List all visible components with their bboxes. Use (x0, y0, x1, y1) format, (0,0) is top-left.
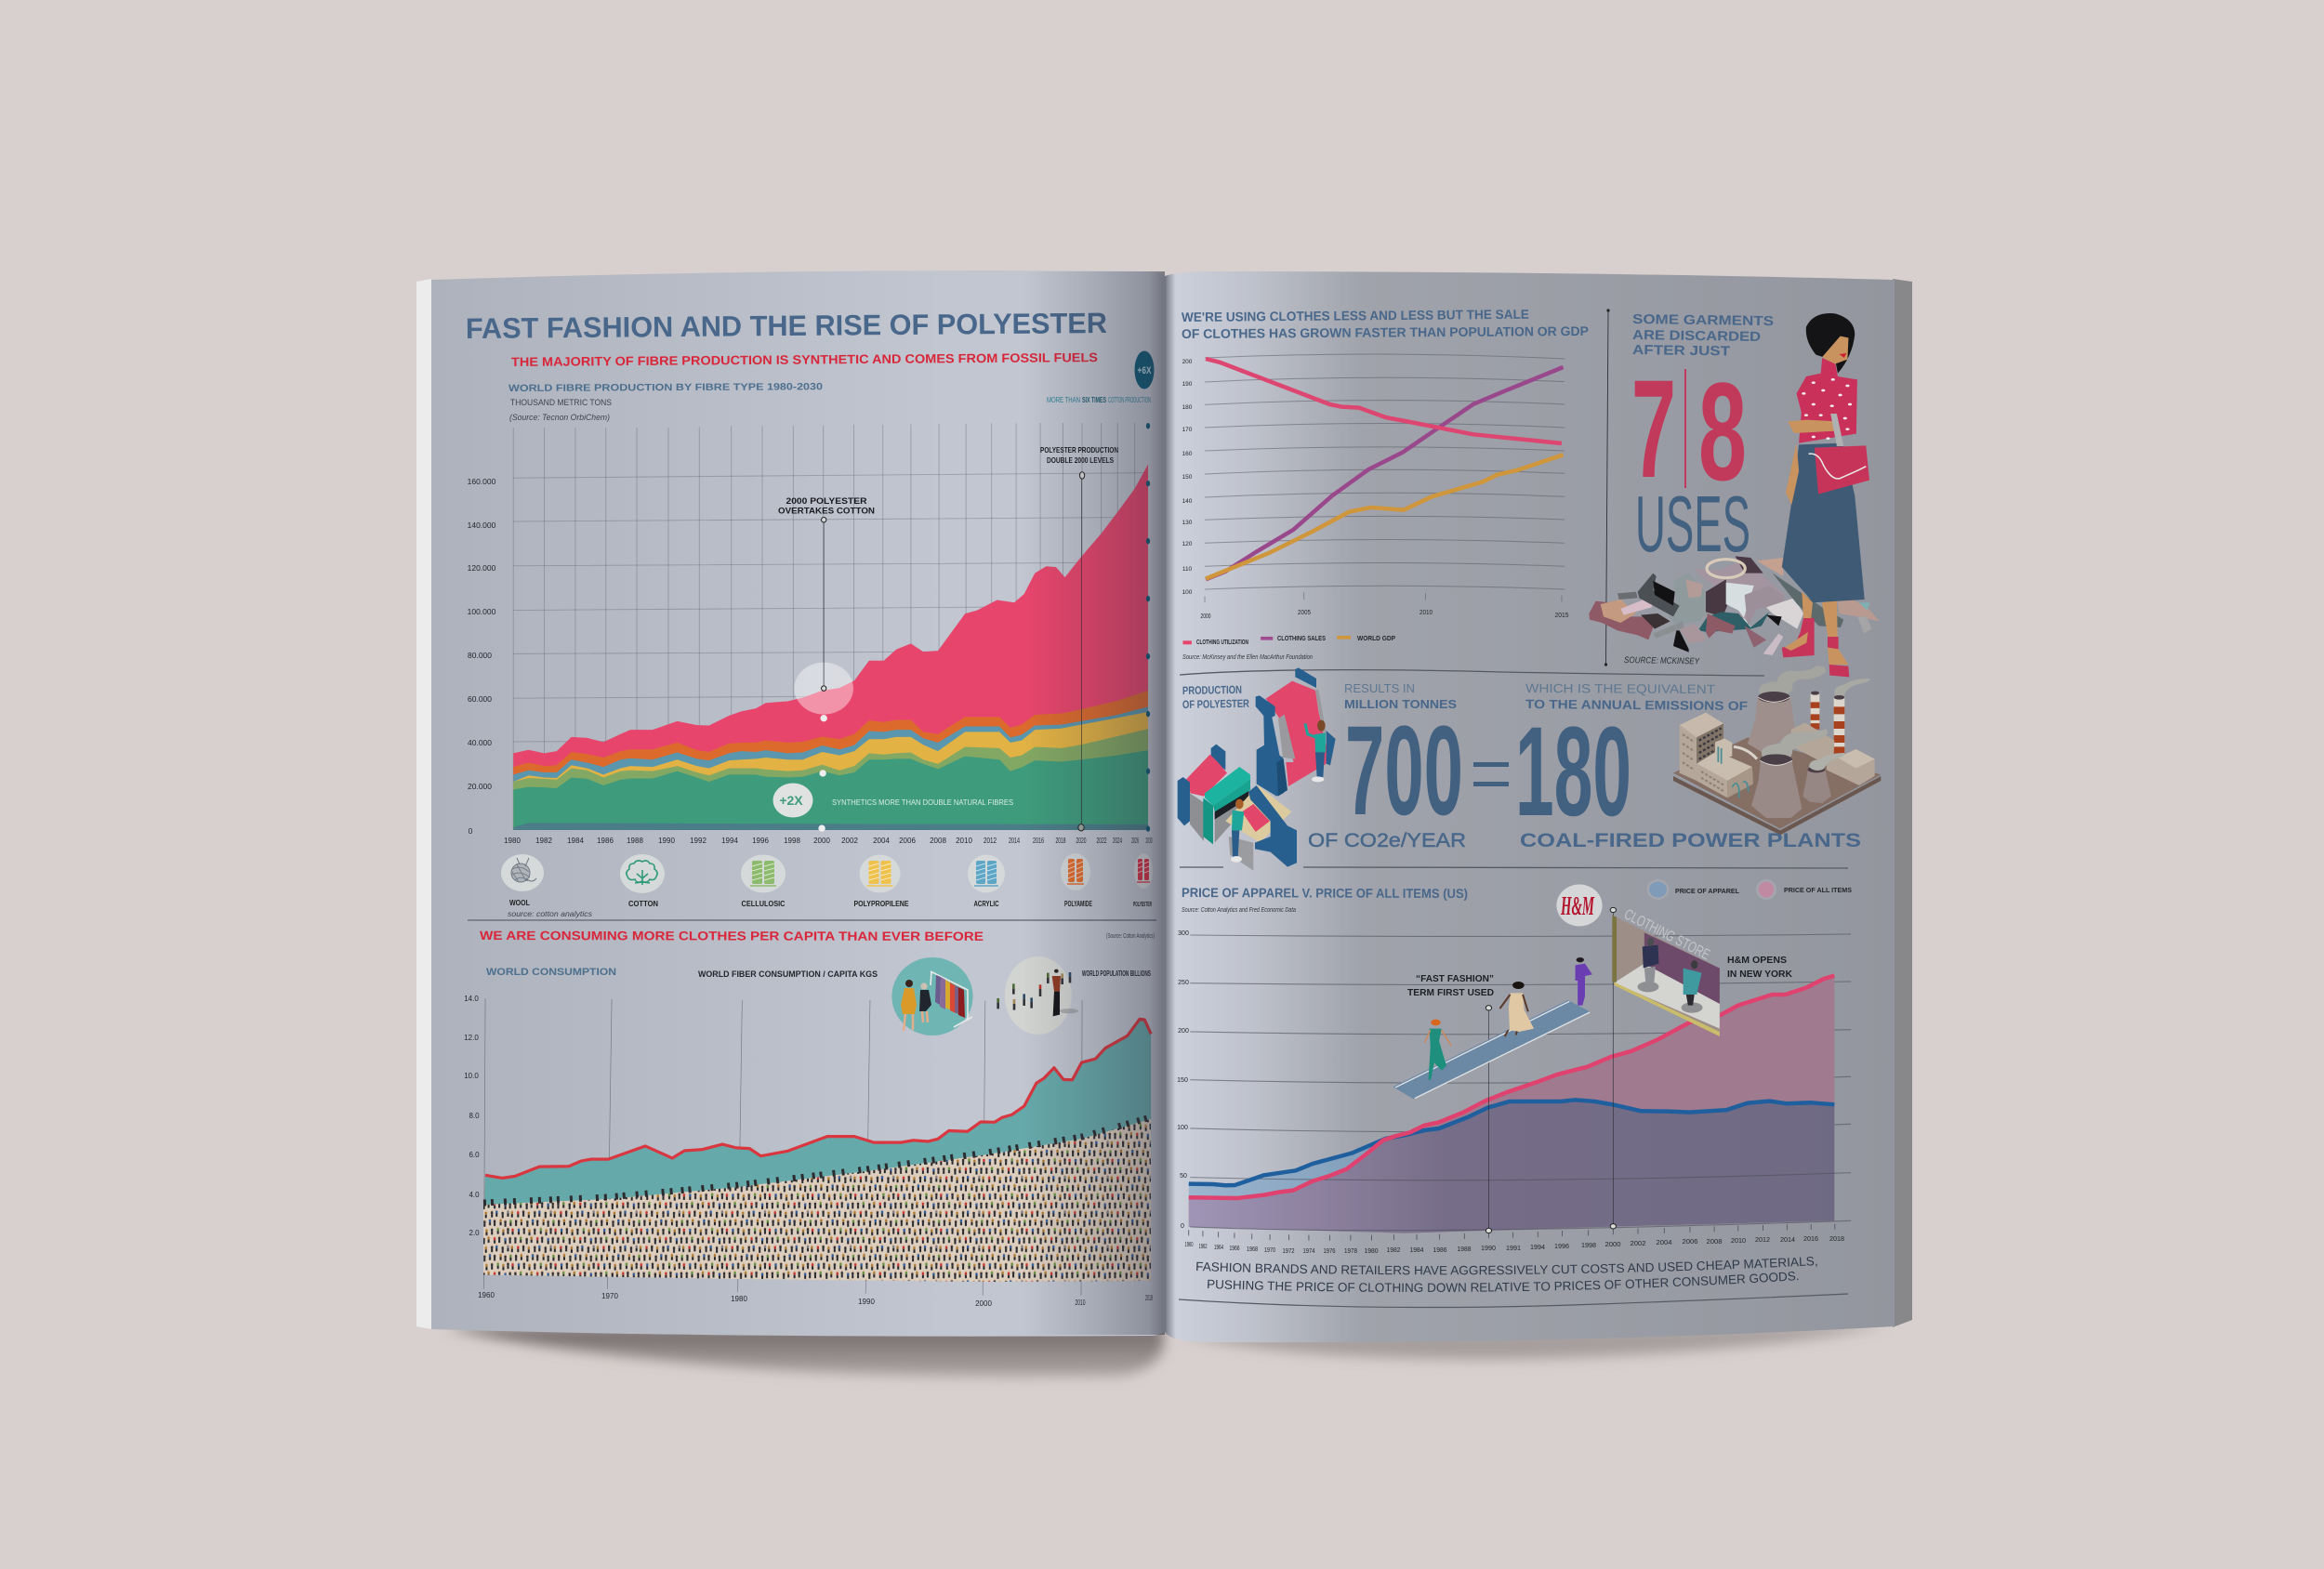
icon: polyamide (1061, 853, 1090, 890)
price chart y labels: 0 (1181, 1223, 1184, 1230)
skirt (1782, 443, 1865, 602)
x axis labels: 2008 (930, 837, 946, 845)
x axis labels: 2010 (956, 837, 972, 845)
polypropylene band (513, 712, 1148, 830)
callout: h&m opens in new york: H&M OPENS (1727, 955, 1787, 966)
big number 700: 700 (1345, 700, 1463, 842)
heading: using clothes less: OF CLOTHES HAS GROWN FASTER THAN POPULATION OR GDP (1182, 323, 1589, 341)
wool band (513, 823, 1148, 830)
hair (1806, 313, 1855, 374)
price chart source: Source: Cotton Analytics and Fred Economic Data (1182, 907, 1296, 914)
h&m leader line (1612, 910, 1614, 1226)
icon: H&M logo (1556, 885, 1603, 926)
consumption x axis labels: 1960 (478, 1291, 495, 1299)
text: some garments are discarded: AFTER JUST (1632, 343, 1730, 359)
price chart x labels: 1964 (1214, 1243, 1223, 1251)
note: more than six times: COTTON PRODUCTION (1108, 396, 1151, 404)
price chart x labels: 2012 (1755, 1235, 1770, 1244)
icon: acrylic (968, 855, 1005, 892)
price chart x labels: 1976 (1324, 1246, 1335, 1255)
world gdp line (1206, 455, 1563, 579)
label: POLYAMIDE (1064, 900, 1092, 908)
text: results in million tonnes: MILLION TONNES (1344, 697, 1457, 711)
x axis labels: 2006 (899, 837, 916, 845)
lower gridlines over area (1190, 1173, 1851, 1231)
illustration: people (998, 956, 1078, 1035)
handbag trim (1809, 454, 1866, 479)
lower machine (1178, 745, 1297, 871)
illustration: woman with handbag (1782, 313, 1869, 677)
label: POLYPROPILENE (853, 900, 909, 908)
x axis labels: 2004 (873, 837, 890, 845)
x axis labels (504, 837, 1153, 845)
gridlines (1205, 354, 1565, 602)
legend swatches (1182, 636, 1351, 644)
line chart y labels (1182, 359, 1193, 596)
price chart x labels: 1978 (1344, 1246, 1357, 1255)
consumption y axis labels: 12.0 (464, 1034, 479, 1042)
fibre legend (501, 853, 1153, 918)
price chart x labels: 2010 (1731, 1236, 1746, 1245)
apparel-only area (1189, 1139, 1386, 1198)
x axis labels: 2020 (1076, 837, 1087, 845)
x axis labels: 2024 (1113, 837, 1122, 845)
line chart legend labels: CLOTHING UTILIZATION (1196, 639, 1248, 646)
fast fashion leader line (1487, 1008, 1489, 1231)
left page: 2030 (1145, 837, 1153, 845)
of co2e per year: OF CO2e/YEAR (1308, 830, 1466, 851)
closing text (1196, 1257, 1817, 1292)
line chart y labels: 200 (1182, 359, 1193, 365)
text: results in million tonnes: RESULTS IN (1344, 682, 1415, 695)
price chart x labels: 1998 (1581, 1241, 1596, 1249)
consumption source: (Source: Cotton Analytics) (1106, 933, 1155, 940)
price legend: PRICE OF ALL ITEMS (1784, 886, 1852, 894)
model in green (1424, 1020, 1451, 1080)
price chart x labels: 1966 (1229, 1244, 1240, 1252)
illustration: clothing store (1612, 916, 1720, 1036)
price chart y labels: 100 (1177, 1125, 1188, 1131)
price chart x labels: 1986 (1433, 1246, 1446, 1254)
x axis labels: 2018 (1056, 837, 1066, 845)
callout: fast fashion term first used (1407, 973, 1494, 998)
price chart x labels: 1974 (1303, 1246, 1314, 1255)
price chart x labels: 1984 (1409, 1246, 1424, 1254)
blouse (1797, 358, 1857, 443)
price chart x labels: 1996 (1554, 1242, 1569, 1250)
price chart heading: PRICE OF APPAREL V. PRICE OF ALL ITEMS (US) (1182, 885, 1468, 901)
callout: 2000 polyester overtakes cotton: 2000 POLYESTER (786, 496, 867, 507)
heading: using clothes less: WE'RE USING CLOTHES LESS AND LESS BUT THE SALE (1182, 307, 1529, 324)
price chart x labels: 2002 (1631, 1239, 1645, 1247)
callout: polyester production double 2000 levels: POLYESTER PRODUCTION (1040, 445, 1118, 455)
label: ACRYLIC (974, 900, 999, 908)
text: production of polyester: OF POLYESTER (1182, 697, 1249, 711)
left page: POLYESTER (1133, 900, 1152, 908)
consumption x axis labels: 2010 (1075, 1299, 1086, 1307)
line chart: utilization sales GDP (1182, 354, 1565, 644)
illustration: shoppers at clothes rack (891, 957, 973, 1035)
callout: +2X (773, 783, 812, 818)
small smoke (1809, 753, 1844, 771)
overlap area (1189, 1100, 1834, 1233)
price chart y labels (1177, 930, 1189, 1230)
axis ticks (1189, 1224, 1835, 1241)
price legend: PRICE OF APPAREL (1675, 887, 1739, 895)
price chart y labels: 200 (1178, 1028, 1189, 1035)
line chart y labels: 150 (1182, 474, 1193, 481)
teal consumption area (483, 1019, 1151, 1228)
consumption x axis labels: 1980 (731, 1295, 747, 1303)
polyester overtakes leader line (823, 520, 825, 689)
right page (1165, 271, 1895, 1342)
low building (1697, 738, 1757, 798)
callout: h&m opens in new york: IN NEW YORK (1727, 969, 1792, 980)
line chart y labels: 160 (1182, 451, 1193, 457)
consumption y axis labels: 4.0 (469, 1191, 480, 1199)
price area chart (1189, 907, 1851, 1241)
back right building (1791, 722, 1834, 762)
blouse dots (1802, 378, 1852, 440)
text: results in million tonnes (1344, 682, 1457, 711)
clothing sales line (1206, 367, 1563, 579)
line chart y labels: 120 (1182, 541, 1193, 547)
gutter shading (1023, 271, 1165, 1335)
illustration: pile of discarded clothes (1589, 556, 1880, 655)
line chart y labels: 190 (1182, 381, 1193, 388)
callout: +2X: +2X (779, 793, 803, 808)
handbag (1815, 445, 1869, 494)
store sign: CLOTHING STORE (1621, 906, 1712, 963)
line chart y labels: 180 (1182, 404, 1193, 411)
illustration: polyester production machines (1178, 667, 1336, 871)
x axis labels: 2000 (813, 837, 830, 845)
callout: h&m opens in new york (1727, 955, 1792, 980)
price chart y labels: 150 (1177, 1077, 1188, 1084)
world consumption heading: WORLD CONSUMPTION (486, 967, 616, 978)
icon: polyester (1134, 853, 1153, 889)
cotton band (513, 750, 1148, 830)
vertical divider (1604, 309, 1610, 666)
marker dots (1486, 907, 1616, 1233)
y axis labels: 60.000 (468, 694, 492, 704)
line chart y labels: 100 (1182, 589, 1193, 596)
illustration: fashion runway (1393, 957, 1592, 1099)
price chart x labels: 1972 (1283, 1246, 1294, 1255)
price chart x labels: 2004 (1657, 1238, 1671, 1246)
x axis labels: 1994 (721, 837, 738, 845)
x axis labels: 2012 (984, 837, 997, 845)
price chart x labels: 2016 (1803, 1234, 1818, 1243)
closing text: PUSHING THE PRICE OF CLOTHING DOWN RELATIVE TO PRICES OF OTHER CONSUMER GOODS. (1208, 1272, 1798, 1292)
front cooling tower (1751, 759, 1802, 818)
y axis labels: 40.000 (468, 738, 492, 747)
consumption area chart (483, 998, 1151, 1296)
line chart y labels: 170 (1182, 427, 1193, 433)
y axis labels: 20.000 (468, 782, 492, 791)
y axis labels: 100.000 (468, 607, 496, 616)
y axis labels: 140.000 (468, 521, 496, 530)
population series label: WORLD POPULATION BILLIONS (1082, 969, 1151, 978)
note: more than six times (1047, 396, 1151, 404)
back smoke (1759, 666, 1826, 699)
acrylic band (513, 706, 1148, 830)
source: source: cotton analytics (508, 909, 593, 918)
highlight circle (794, 663, 853, 715)
face (1822, 336, 1848, 364)
price chart y labels: 300 (1178, 930, 1189, 937)
consumption x axis labels: 1990 (858, 1298, 875, 1306)
coal fired power plants: COAL-FIRED POWER PLANTS (1520, 830, 1861, 851)
text: equivalent annual emissions (1525, 681, 1748, 713)
consumption y axis labels: 2.0 (469, 1229, 480, 1237)
big number 7/8 (1631, 350, 1747, 509)
price chart x labels: 1988 (1458, 1245, 1471, 1253)
all items price line (1189, 976, 1834, 1198)
price chart x labels: 2008 (1707, 1237, 1722, 1246)
price chart x labels: 1980 (1365, 1246, 1378, 1255)
callout: polyester production double 2000 levels: DOUBLE 2000 LEVELS (1047, 455, 1114, 465)
callout: fast fashion term first used: “FAST FASHION” (1416, 973, 1494, 984)
consumption series label: WORLD FIBER CONSUMPTION / CAPITA KGS (698, 969, 878, 979)
line chart legend labels: WORLD GDP (1357, 636, 1395, 642)
callout: +6X: +6X (1138, 365, 1152, 376)
crowd: world population (483, 1117, 1151, 1282)
price chart x labels: 1970 (1264, 1246, 1275, 1254)
red subtitle: THE MAJORITY OF FIBRE PRODUCTION IS SYNTHETIC AND COMES FROM FOSSIL FUELS (511, 350, 1098, 369)
icon: cellulosic (741, 855, 786, 892)
x axis labels: 1996 (752, 837, 769, 845)
icon: cotton (620, 854, 665, 893)
text: production of polyester (1182, 683, 1249, 711)
x axis labels: 1990 (658, 837, 675, 845)
legs and shoes (1782, 592, 1849, 677)
price chart x labels: 2018 (1829, 1234, 1844, 1243)
label: WOOL (509, 899, 530, 907)
doubled production leader line (1081, 475, 1083, 828)
line chart x labels: 2010 (1419, 608, 1433, 616)
chart units: THOUSAND METRIC TONS (510, 398, 612, 408)
icon: polypropylene (859, 855, 900, 892)
chimney 1 (1811, 692, 1819, 728)
year lines (483, 998, 1082, 1296)
white page edge (416, 279, 431, 1329)
price chart x labels: 1994 (1530, 1243, 1545, 1251)
line chart source: Source: McKinsey and the Ellen MacArthur Foundation (1182, 654, 1313, 661)
price chart x labels: 1960 (1184, 1240, 1194, 1248)
text: some garments are discarded (1632, 312, 1775, 359)
line chart legend labels: CLOTHING SALES (1277, 636, 1326, 642)
line chart x labels (1201, 608, 1569, 620)
price legend (1647, 879, 1852, 900)
consumption x axis labels: 1970 (601, 1292, 618, 1300)
title: FAST FASHION AND THE RISE OF POLYESTER (466, 307, 1107, 345)
shadow under magazine (446, 1325, 1887, 1377)
line chart x labels: 2015 (1554, 611, 1569, 619)
marker dots (818, 472, 1085, 832)
y axis labels: 160.000 (468, 477, 496, 486)
price chart x labels: 1982 (1387, 1246, 1400, 1254)
callout: polyester production double 2000 levels (1040, 445, 1118, 465)
all items area (1189, 976, 1834, 1233)
price chart x labels: 2006 (1683, 1237, 1697, 1246)
x axis labels: 1982 (535, 837, 552, 845)
consumption y axis labels: 8.0 (469, 1112, 480, 1120)
consumption y axis labels: 14.0 (464, 995, 479, 1003)
equals sign (1473, 762, 1509, 786)
apparel price line (1189, 1100, 1834, 1185)
lips (1840, 353, 1846, 358)
consumption y axis labels: 6.0 (469, 1151, 480, 1159)
line chart y labels: 130 (1182, 520, 1193, 526)
right low building (1827, 749, 1875, 785)
text: equivalent annual emissions: WHICH IS THE EQUIVALENT (1525, 681, 1715, 696)
heading: using clothes less (1182, 307, 1589, 341)
callout: 2000 polyester overtakes cotton (778, 496, 875, 517)
big number 7/8: 7 (1631, 350, 1676, 507)
model in beige (1499, 982, 1534, 1036)
polyester band (513, 464, 1148, 830)
clothing utilization line (1206, 359, 1562, 443)
price chart x labels: 2014 (1780, 1235, 1795, 1244)
callout: 2000 polyester overtakes cotton: OVERTAKES COTTON (778, 506, 875, 517)
price chart y labels: 250 (1178, 980, 1189, 986)
text: some garments are discarded: SOME GARMENTS (1632, 312, 1775, 329)
x axis labels: 1992 (690, 837, 706, 845)
x axis labels: 2022 (1097, 837, 1107, 845)
callout: +6X (1134, 351, 1155, 389)
text: equivalent annual emissions: TO THE ANNUAL EMISSIONS OF (1525, 697, 1748, 713)
base side (1673, 776, 1881, 835)
model in purple (1576, 957, 1592, 1006)
price chart x labels (1184, 1234, 1844, 1255)
text: production of polyester: PRODUCTION (1182, 683, 1242, 697)
big number 180: 180 (1515, 701, 1631, 843)
upper body (1782, 313, 1869, 602)
upper machine (1256, 667, 1336, 797)
x axis labels: 2014 (1009, 837, 1020, 845)
consumption x axis labels: 2000 (975, 1299, 992, 1308)
closing text: FASHION BRANDS AND RETAILERS HAVE AGGRESSIVELY CUT COSTS AND USED CHEAP MATERIALS, (1196, 1257, 1817, 1275)
line chart x labels: 2000 (1201, 612, 1210, 620)
consumption y axis labels (464, 995, 480, 1237)
small cooling tower (1802, 770, 1831, 803)
word: uses: USES (1635, 481, 1750, 569)
x axis labels: 1988 (627, 837, 643, 845)
bag strap (1830, 414, 1843, 446)
illustration: coal power plant (1673, 666, 1881, 835)
gridlines (513, 423, 1147, 830)
y axis labels (468, 477, 496, 836)
label: COTTON (628, 900, 658, 908)
x axis labels: 1986 (597, 837, 614, 845)
back arm (1786, 443, 1799, 505)
x axis labels: 2002 (841, 837, 858, 845)
consumption y axis labels: 10.0 (464, 1072, 479, 1080)
cellulosic band (513, 729, 1148, 830)
line chart legend labels (1196, 636, 1395, 646)
polyamide band (513, 691, 1148, 830)
icon: wool (501, 854, 544, 891)
label: CELLULOSIC (742, 900, 786, 908)
right page block edge (1893, 279, 1912, 1327)
page sheet (1165, 271, 1895, 1342)
x axis labels: 1998 (784, 837, 800, 845)
right edge dots (1146, 423, 1150, 832)
y axis labels: 120.000 (468, 563, 496, 573)
note: more than six times: SIX TIMES (1082, 396, 1106, 404)
callout: fast fashion term first used: TERM FIRST USED (1407, 987, 1494, 998)
consumption heading: WE ARE CONSUMING MORE CLOTHES PER CAPITA THAN EVER BEFORE (480, 929, 984, 943)
x axis labels: 1980 (504, 837, 521, 845)
y axis labels: 0 (469, 826, 473, 836)
big number 7/8: 8 (1698, 353, 1747, 509)
gridlines (1190, 934, 1851, 1132)
chimney 2 (1834, 697, 1844, 755)
text: some garments are discarded: ARE DISCARDED (1632, 328, 1761, 345)
chart heading: WORLD FIBRE PRODUCTION BY FIBRE TYPE 1980-2030 (508, 381, 823, 394)
y axis labels: 80.000 (468, 651, 492, 660)
source mckinsey: SOURCE: MCKINSEY (1624, 655, 1700, 666)
page sheet (431, 270, 1165, 1337)
middle smoke (1762, 729, 1828, 762)
price chart x labels: 1990 (1481, 1244, 1496, 1252)
price chart x labels: 1962 (1199, 1242, 1207, 1250)
forearm (1788, 420, 1841, 433)
left page: 2018 (1145, 1294, 1153, 1302)
note: more than six times: MORE THAN (1047, 396, 1080, 404)
price chart x labels: 1968 (1247, 1245, 1258, 1253)
tall building (1680, 713, 1723, 781)
line chart x labels: 2005 (1298, 608, 1311, 616)
consumption x axis labels (478, 1291, 1153, 1308)
price chart x labels: 2000 (1604, 1240, 1621, 1248)
price chart x labels: 1991 (1506, 1244, 1521, 1252)
left page (431, 270, 1165, 1337)
line chart y labels: 140 (1182, 498, 1193, 505)
consumption line (485, 1019, 1151, 1178)
stacked area chart: fibre production (513, 423, 1150, 832)
x axis labels: 1984 (567, 837, 584, 845)
line chart y labels: 110 (1182, 566, 1193, 573)
price chart y labels: 50 (1180, 1173, 1187, 1180)
base (1673, 737, 1881, 829)
back cooling tower (1748, 697, 1795, 753)
x axis labels: 2016 (1033, 837, 1044, 845)
icon: H&M logo: H&M (1560, 892, 1595, 921)
note: synthetics more than double: SYNTHETICS MORE THAN DOUBLE NATURAL FIBRES (832, 798, 1013, 807)
x axis labels: 2026 (1131, 837, 1139, 845)
chart source: (Source: Tecnon OrbiChem) (509, 413, 610, 422)
